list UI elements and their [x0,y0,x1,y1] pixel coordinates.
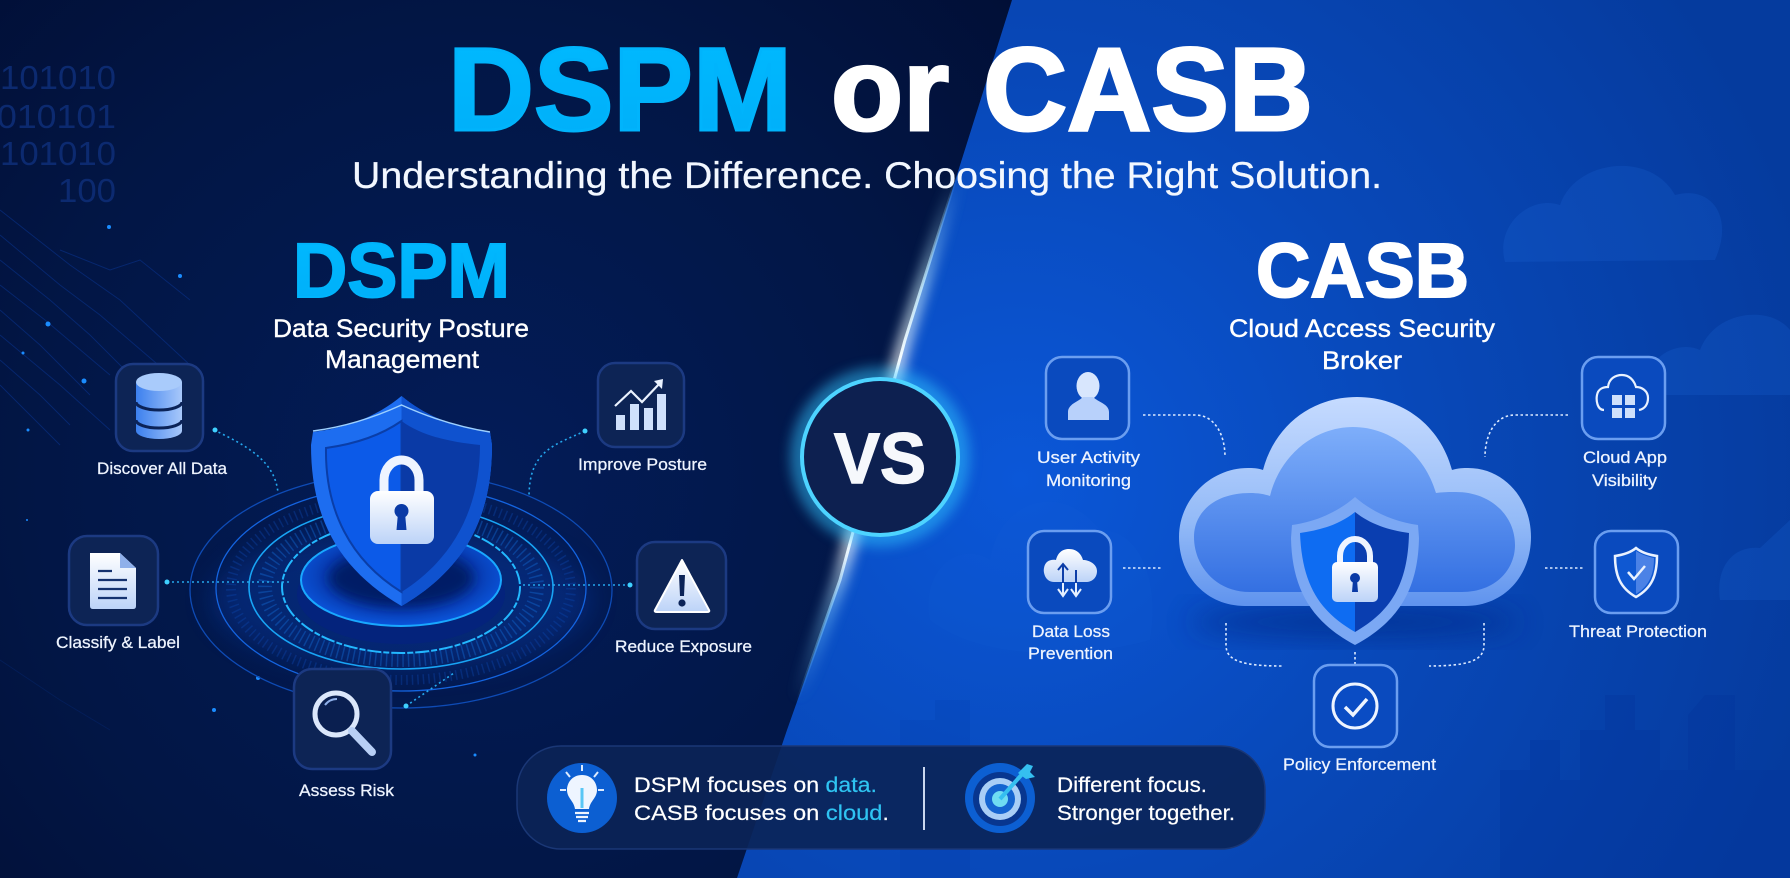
binary digits decoration: 101010 [0,135,116,172]
faint city silhouette right [900,695,1790,878]
icon card: Reduce Exposure [615,542,752,656]
icon: target with arrow [965,763,1035,833]
faint background clouds right [928,166,1790,653]
icon card: Improve Posture [578,363,707,474]
glowing diagonal divider [737,0,1012,878]
icon card: Data Loss Prevention [1028,531,1113,663]
icon: shield check [1615,548,1657,597]
divider [923,767,925,830]
label: Data Loss [1032,622,1110,641]
icon card: Threat Protection [1569,531,1707,641]
panel: DSPM [56,228,752,800]
binary digits decoration [0,59,116,209]
VS badge [790,367,970,547]
CASB full name: Cloud Access Security [1229,315,1496,343]
icon: user [1068,372,1109,420]
summary text: together: Different focus. [1057,773,1207,797]
title [448,24,1313,156]
panel: CASB [1028,228,1707,774]
DSPM heading: DSPM [293,228,510,314]
label: Cloud App [1583,448,1667,467]
icon card: Assess Risk [294,669,395,800]
CASB full name: Broker [1322,347,1402,375]
label: Assess Risk [299,781,395,800]
DSPM full name [273,315,529,374]
icon: large shield with lock [311,396,492,606]
callout: bottom summary bar [517,746,1265,849]
glowing particle dots [22,225,476,756]
icon card: Discover All Data [97,364,228,478]
icon: cloud with arrows [1044,549,1097,596]
icon card: Cloud App Visibility [1582,357,1667,490]
icon card: Classify & Label [56,536,180,652]
icon: magnifier [315,693,372,752]
icon card: Data Loss Prevention: Prevention [1028,644,1113,663]
icon: small shield with lock [1291,497,1419,645]
icon card: Cloud App Visibility: Visibility [1592,471,1658,490]
icon: light bulb [547,763,617,833]
title: or [831,24,949,156]
CASB heading: CASB [1256,228,1469,314]
label: User Activity [1037,448,1141,467]
DSPM full name: Data Security Posture [273,315,529,343]
label: Threat Protection [1569,622,1707,641]
label: Improve Posture [578,455,707,474]
lock [370,460,434,544]
summary text: focus [634,773,889,825]
concentric rings [190,472,612,708]
summary text: together [1057,773,1235,825]
binary digits decoration: 010101 [0,98,116,135]
binary digits decoration: 101010 [0,59,116,96]
summary text: together: Stronger together. [1057,801,1235,825]
dotted connectors [167,430,630,706]
binary digits decoration: 100 [58,172,116,209]
icon: rising bar chart [615,379,666,430]
label: Policy Enforcement [1283,755,1436,774]
icon card: Policy Enforcement [1283,665,1436,774]
icon: check circle [1333,684,1377,728]
cloud shadow [1190,608,1520,636]
label: Reduce Exposure [615,637,752,656]
summary text: focus: DSPM focuses on data. [634,773,877,797]
icon: database [136,373,182,439]
icon: large cloud [1179,397,1531,606]
summary text: focus: CASB focuses on cloud. [634,801,889,825]
DSPM full name: Management [325,346,479,374]
icon card: User Activity Monitoring: Monitoring [1046,471,1131,490]
label: Classify & Label [56,633,180,652]
circuit lines decoration [0,210,190,730]
background: blue right half [737,0,1790,878]
icon: warning triangle [655,560,709,612]
dotted connectors [1123,415,1583,666]
subtitle: Understanding the Difference. Choosing the Right Solution. [352,155,1382,196]
VS badge: VS [834,420,926,499]
platform under shield [297,534,505,644]
icon: cloud apps [1597,375,1648,418]
CASB full name [1229,315,1496,375]
title: CASB [983,24,1313,156]
icon card: User Activity Monitoring [1037,357,1141,490]
label: Discover All Data [97,459,228,478]
title: DSPM [448,24,792,156]
icon: document [90,553,136,609]
